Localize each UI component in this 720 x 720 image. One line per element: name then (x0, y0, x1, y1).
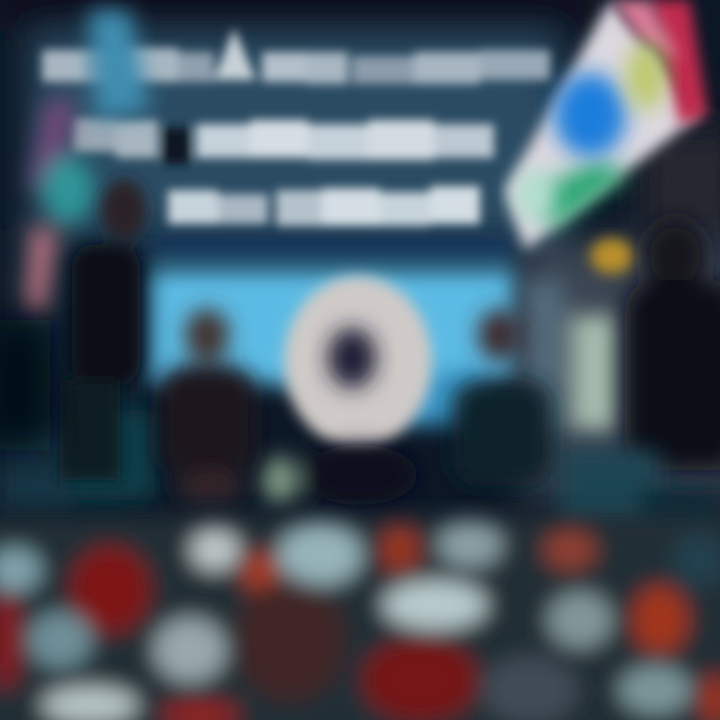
speaker 3 (452, 309, 552, 485)
yellow badge (590, 238, 634, 274)
central white disc (284, 276, 432, 448)
left flag (24, 10, 150, 315)
speaker 1 (60, 180, 146, 480)
audience (0, 515, 720, 720)
speaker 2 (160, 309, 255, 504)
table front (0, 410, 720, 540)
headline line 1 (42, 28, 550, 84)
right flag (505, 0, 708, 250)
headline line 3 (168, 186, 480, 226)
far right figure (625, 219, 720, 470)
left dark audience edge (0, 320, 50, 450)
blurred headline text block (42, 28, 550, 226)
headline line 2 (72, 118, 494, 164)
stage backdrop (0, 0, 720, 500)
bright blue screen (150, 238, 515, 425)
right wall highlight (525, 280, 616, 430)
